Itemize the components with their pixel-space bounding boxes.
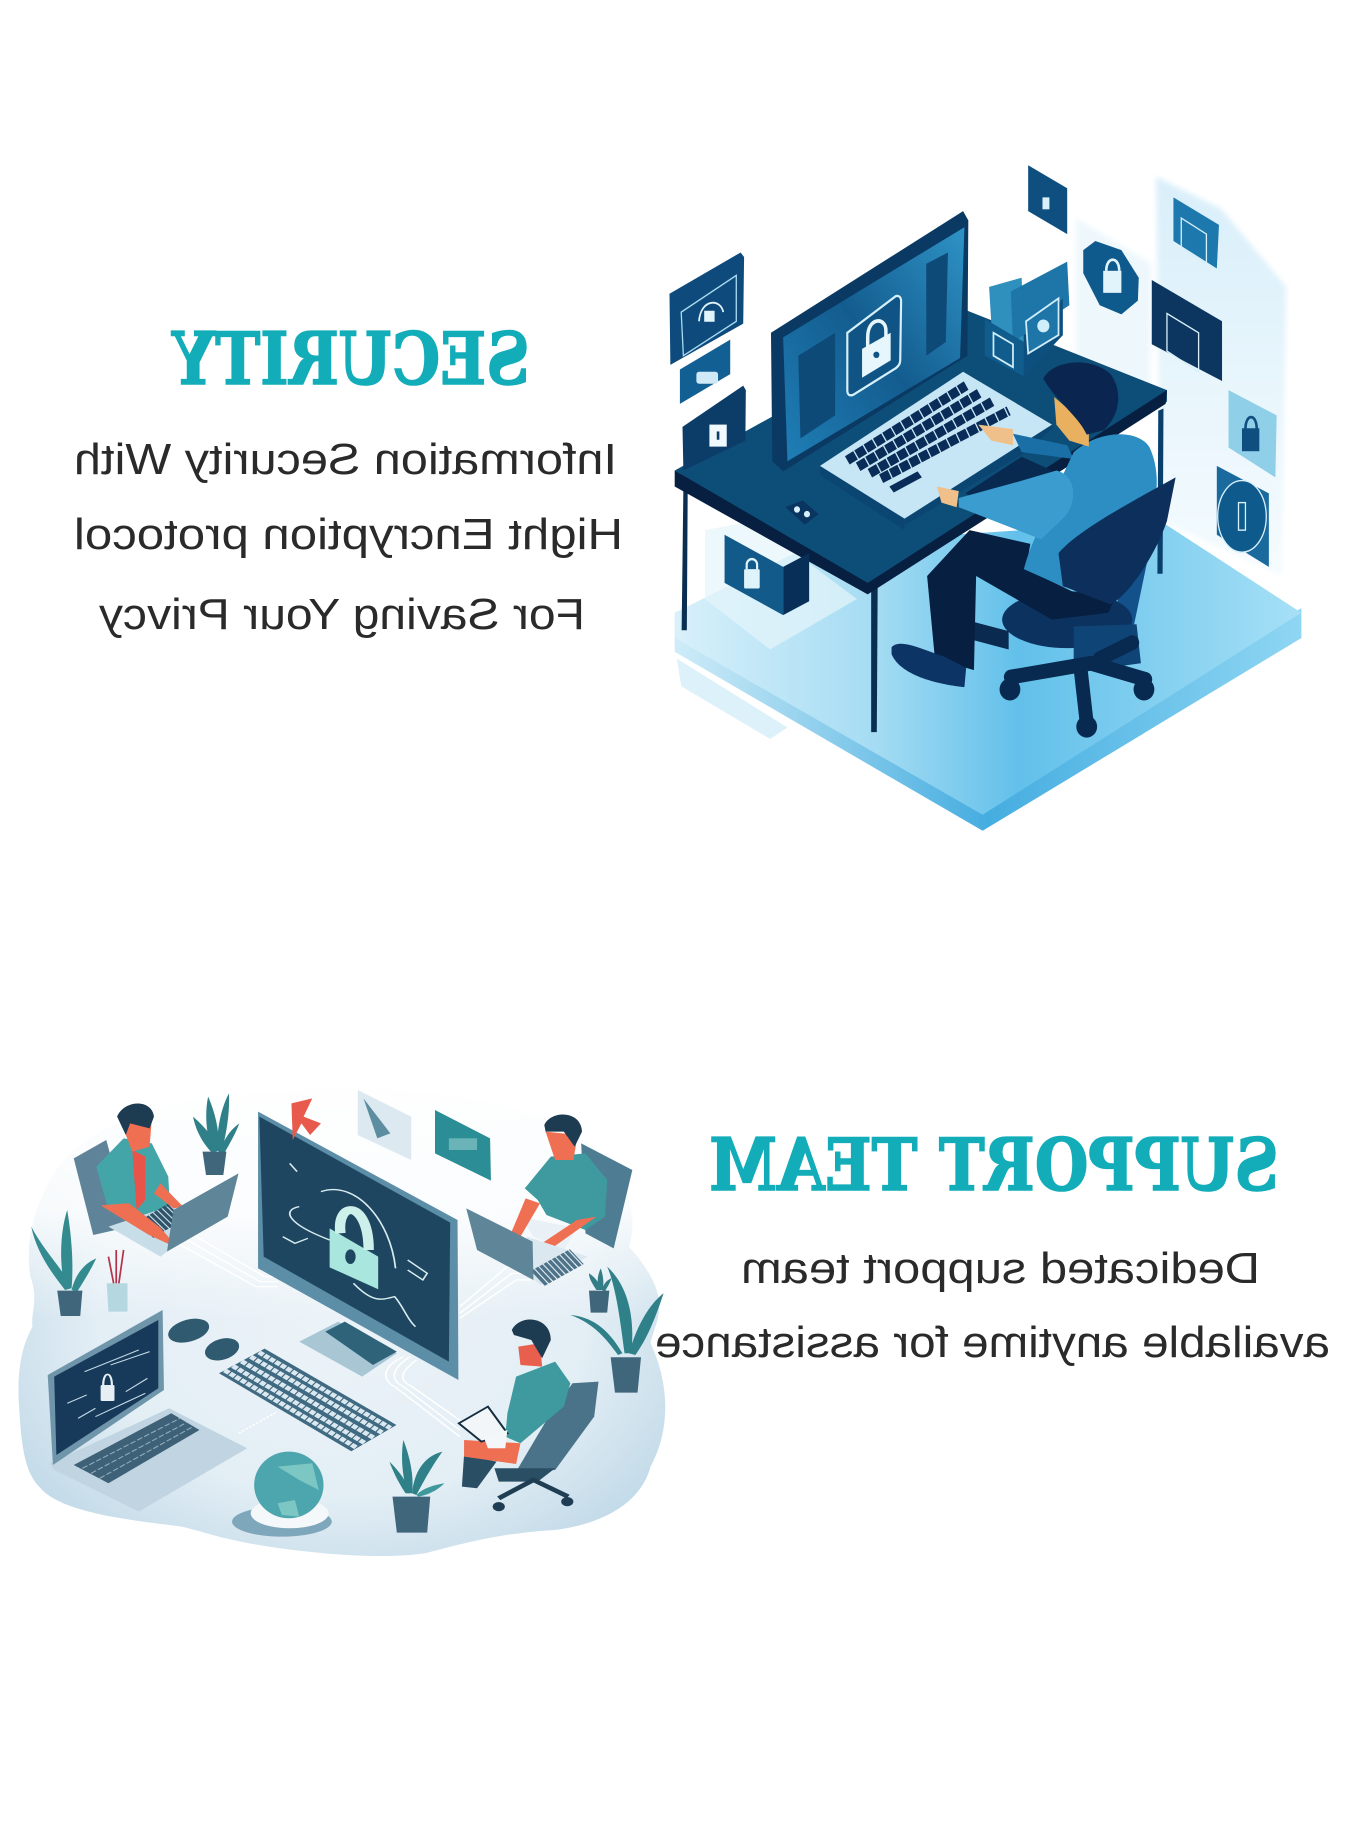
chair bbox=[1000, 539, 1154, 738]
tile: top lock bbox=[1028, 165, 1067, 234]
tile: left small bbox=[680, 340, 730, 404]
tile: window bbox=[1173, 197, 1219, 269]
support description bbox=[655, 1244, 1330, 1367]
person top right with laptop bbox=[466, 1114, 632, 1285]
tile: circle alert bbox=[1217, 466, 1269, 567]
paper plane panel bbox=[358, 1090, 411, 1160]
tile: left large bbox=[669, 252, 744, 365]
monitor with padlock bbox=[258, 1112, 458, 1380]
line 2: Hight Encryption protocol bbox=[74, 510, 623, 559]
person with tablet on chair bbox=[459, 1320, 599, 1511]
security description bbox=[74, 435, 623, 639]
file box with lock bbox=[985, 262, 1069, 376]
illustration: support team bbox=[9, 1073, 677, 1567]
floating security tiles bbox=[669, 165, 1277, 567]
plant: small right bbox=[589, 1268, 612, 1313]
line 1: Dedicated support team bbox=[741, 1244, 1260, 1293]
line 2: available anytime for assistance bbox=[655, 1318, 1330, 1367]
line 1: Information Security With bbox=[74, 435, 617, 484]
drawer box with lock bbox=[725, 535, 809, 615]
back wall panels bbox=[1076, 177, 1286, 576]
heading: SECURITY: SECURITY bbox=[171, 316, 530, 401]
computer mice bbox=[163, 1314, 244, 1365]
heading: SUPPORT TEAM: SUPPORT TEAM bbox=[709, 1122, 1279, 1207]
tile: dark panel bbox=[1152, 280, 1222, 381]
flag bbox=[291, 1098, 321, 1140]
tile: light lock bbox=[1229, 390, 1277, 477]
line 3: For Saving Your Privcy bbox=[99, 590, 585, 639]
teal card bbox=[435, 1110, 491, 1181]
laptop lower left bbox=[48, 1310, 247, 1512]
tile: shield lock bbox=[1083, 241, 1139, 314]
tile: left lower bbox=[683, 386, 746, 470]
plant: top centre bbox=[193, 1093, 239, 1175]
person typing bbox=[892, 362, 1157, 687]
globe bbox=[232, 1452, 332, 1537]
person top left with laptop bbox=[74, 1104, 239, 1257]
plant: bottom centre bbox=[389, 1440, 445, 1533]
keyboard bbox=[219, 1349, 396, 1451]
chair backrest bbox=[1059, 477, 1176, 605]
laptop bbox=[820, 372, 1054, 530]
illustration: security workstation bbox=[669, 165, 1301, 831]
cables bbox=[178, 1233, 531, 1437]
floor platform bbox=[675, 521, 1301, 831]
plant: large right bbox=[570, 1267, 664, 1393]
background cloud bbox=[9, 1073, 677, 1567]
monitor with lock bbox=[771, 211, 968, 471]
plant: left bbox=[31, 1210, 96, 1316]
desk bbox=[675, 310, 1167, 732]
pen cup bbox=[107, 1250, 128, 1312]
